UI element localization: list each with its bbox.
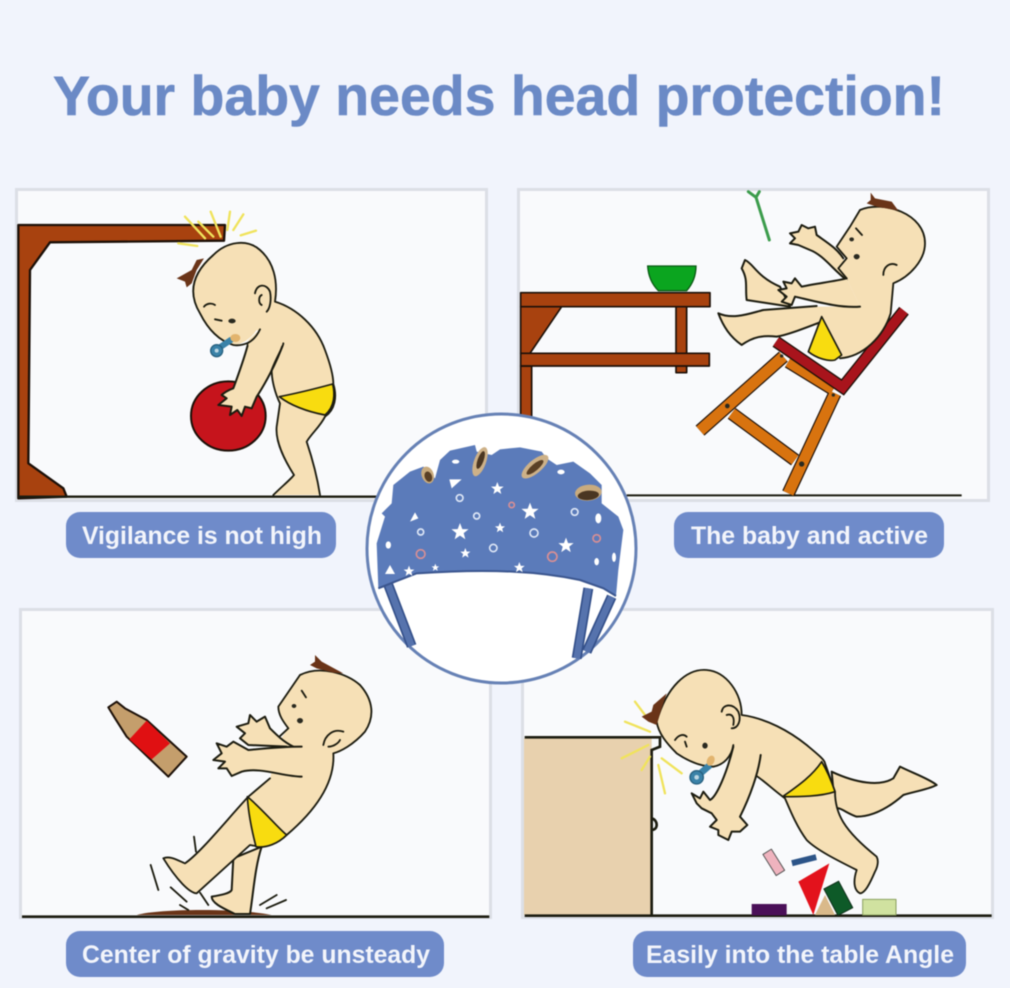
eyes (849, 237, 860, 259)
ball (191, 381, 266, 451)
spoon (748, 192, 769, 240)
cabinet edges (525, 737, 660, 915)
baby rear leg (742, 260, 790, 307)
baby back leg (832, 767, 937, 817)
baby outline (163, 671, 371, 893)
baby arm skin joint (248, 327, 287, 346)
helmet shell (377, 445, 623, 596)
diaper (783, 762, 835, 797)
hair (177, 258, 204, 287)
helmet rings (416, 495, 600, 561)
label pill: Vigilance is not high (82, 522, 322, 550)
impact burst (178, 212, 256, 246)
panel: the baby and active (518, 190, 988, 558)
face (856, 228, 897, 275)
face (204, 304, 222, 321)
helmet lower edge (378, 571, 616, 596)
illustration: baby slipping backwards (22, 655, 489, 917)
label pill (633, 931, 966, 977)
brow (675, 735, 687, 747)
panel frame (20, 610, 490, 918)
impact burst (622, 702, 682, 793)
label pill: Easily into the table Angle (646, 941, 954, 969)
ear and brow (302, 691, 343, 747)
baby body fill (163, 671, 371, 893)
motion lines (151, 837, 286, 910)
helmet straps (388, 585, 612, 658)
eyes (292, 704, 303, 723)
label pill (674, 512, 944, 558)
table (521, 293, 710, 419)
panel: vigilance is not high (16, 190, 486, 558)
baby standing leg (212, 847, 262, 914)
panel frame (16, 190, 486, 500)
baby body fill (813, 207, 925, 358)
baby outline (657, 670, 878, 893)
panel frame (518, 190, 988, 500)
label pill: The baby and active (691, 522, 928, 550)
ground line (18, 493, 380, 500)
bowl (648, 266, 696, 291)
label pill (66, 931, 444, 977)
blocks (752, 849, 896, 915)
pacifier (211, 334, 240, 357)
diaper (279, 384, 334, 415)
helmet vents (419, 445, 602, 502)
title: Your baby needs head protection! (53, 64, 945, 127)
diaper (808, 317, 842, 360)
illustration: baby falling into cabinet corner (524, 670, 992, 916)
baby body fill (657, 670, 878, 893)
illustration: baby hitting head on table while picking up ball (18, 212, 380, 498)
eye (702, 743, 708, 749)
ground line (525, 912, 992, 920)
bottle (108, 702, 187, 777)
helmet stars (385, 460, 616, 576)
hair (867, 193, 898, 211)
spill (137, 910, 272, 915)
ground line (627, 492, 962, 498)
baby arms (692, 747, 761, 840)
baby rear arm (237, 715, 293, 747)
diaper (247, 797, 287, 847)
baby front leg (718, 306, 822, 345)
ground line (22, 913, 489, 921)
panel frame (522, 610, 992, 918)
label pill: Center of gravity be unsteady (82, 941, 430, 969)
panel: easily into the table angle (522, 610, 992, 977)
label pill (66, 512, 336, 558)
chair bolts (725, 354, 835, 467)
panel: center of gravity be unsteady (20, 610, 490, 977)
ear (722, 705, 740, 728)
pacifier (690, 754, 716, 784)
table (18, 225, 225, 498)
baby front arm (213, 742, 302, 777)
helmet badge (367, 414, 636, 683)
hair (310, 655, 343, 673)
ear (255, 286, 271, 312)
chair (700, 311, 904, 493)
baby outline (193, 243, 335, 495)
baby body fill (193, 243, 335, 495)
baby raised arm (790, 225, 847, 280)
illustration: baby tipping over on chair (521, 192, 962, 495)
baby arm (218, 343, 283, 416)
hair (642, 693, 667, 725)
cabinet (524, 738, 652, 915)
baby outline (837, 207, 925, 358)
badge circle (367, 414, 636, 683)
baby lower arm (778, 278, 860, 307)
eye (228, 319, 236, 323)
helmet (377, 445, 623, 658)
